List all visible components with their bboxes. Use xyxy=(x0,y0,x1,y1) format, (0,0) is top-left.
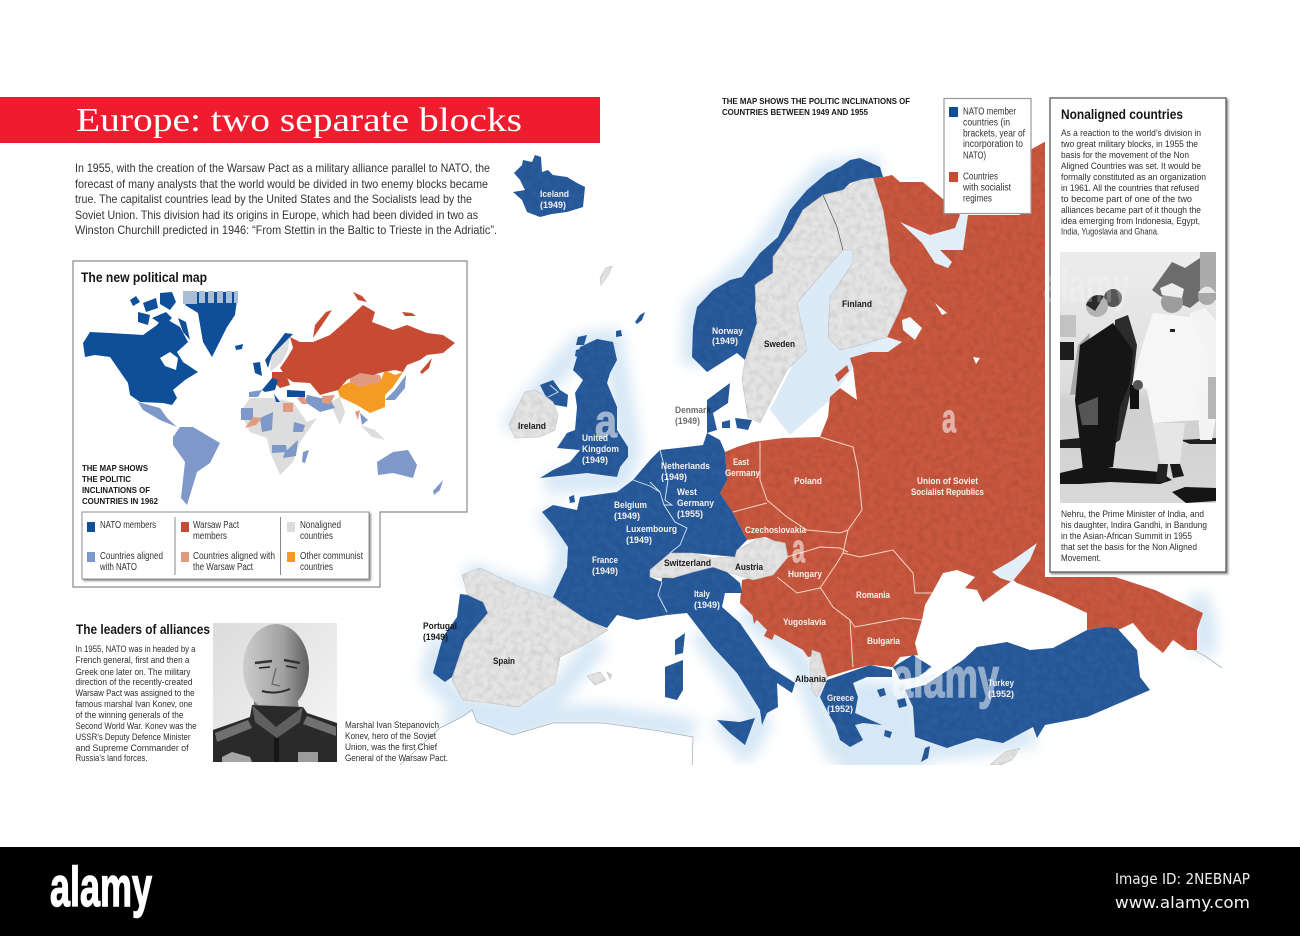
panel heading: Nonaligned countries xyxy=(1061,106,1183,122)
watermarks: alamy xyxy=(1043,260,1130,313)
caption: Konev: General of the Warsaw Pact. xyxy=(345,753,448,764)
country labels: Germany xyxy=(725,468,761,479)
socialist countries' borders xyxy=(733,437,932,667)
country labels: Italy xyxy=(694,589,711,600)
legend: main map xyxy=(944,98,1031,214)
country labels: Germany xyxy=(677,498,715,509)
intro text: Soviet Union. This division had its origins in Europe, which had been divided in two as xyxy=(75,208,478,222)
aligned with NATO xyxy=(138,375,443,505)
legend: 1962 map: Countries aligned with xyxy=(193,551,275,562)
text: leaders of alliances: Greek one later on. The military xyxy=(76,667,191,678)
panel text: Aligned Countries was set. It would be xyxy=(1061,161,1201,172)
world map xyxy=(83,291,455,505)
photo caption: his daughter, Indira Gandhi, in Bandung xyxy=(1061,520,1207,531)
Baltic and Gulf of Bothnia xyxy=(770,245,905,435)
legend: main map: NATO member xyxy=(963,106,1017,118)
panel text: in 1961. All the countries that refused xyxy=(1061,183,1199,194)
legend: main map: Countries xyxy=(963,172,998,182)
United Kingdom xyxy=(540,339,628,478)
panel text: As a reaction to the world’s division in xyxy=(1061,128,1201,139)
panel text: to become part of one of the two xyxy=(1061,194,1192,205)
inland seas and lakes xyxy=(860,215,1037,582)
country labels: Austria xyxy=(735,562,764,573)
legend: main map: with socialist xyxy=(962,182,1011,194)
panel text: two great military blocks, in 1955 the xyxy=(1061,139,1198,150)
caption: Konev: Union, was the first Chief xyxy=(345,742,437,753)
title banner: Europe: two separate blocks xyxy=(76,102,522,139)
map note: INCLINATIONS OF xyxy=(82,485,150,495)
panel heading: The new political map xyxy=(81,269,207,285)
country labels: (1949) xyxy=(712,336,738,347)
legend: 1962 map: NATO members xyxy=(100,520,156,531)
photo caption: Movement. xyxy=(1061,553,1101,564)
legend: 1962 map: Warsaw Pact xyxy=(193,520,239,531)
country labels: Romania xyxy=(856,590,891,601)
intro text xyxy=(75,161,497,237)
watermarks: a xyxy=(942,397,956,441)
country labels: Denmark xyxy=(675,405,712,416)
intro text: Winston Churchill predicted in 1946: “From Stettin in the Baltic to Trieste in the Adriatic”. xyxy=(75,223,497,237)
intro text: true. The capitalist countries lead by the United States and the Socialists lead by the xyxy=(75,192,472,206)
Hudson Bay xyxy=(160,352,178,370)
Caspian coast xyxy=(1193,650,1222,668)
country labels: (1949) xyxy=(675,416,700,427)
Western borders on the NATO block xyxy=(548,385,687,612)
Spain xyxy=(452,568,608,707)
country labels xyxy=(423,189,1015,715)
logo: alamy xyxy=(50,855,152,918)
map heading note xyxy=(722,96,910,117)
country labels: (1949) xyxy=(694,600,720,611)
Portugal xyxy=(433,594,488,682)
country labels: Bulgaria xyxy=(867,636,901,647)
legend: 1962 map: with NATO xyxy=(99,562,137,573)
legend: main map: incorporation to xyxy=(963,139,1023,150)
Albania xyxy=(810,650,827,697)
legend: 1962 map: Other communist xyxy=(300,551,363,562)
country labels: Turkey xyxy=(988,678,1015,689)
panel: the new political map xyxy=(73,261,467,587)
watermarks: a xyxy=(595,395,617,447)
site url: www.alamy.com xyxy=(1115,893,1250,912)
text: leaders of alliances: In 1955, NATO was in headed by a xyxy=(76,644,196,655)
legend: 1962 map: Nonaligned xyxy=(300,520,341,531)
text: leaders of alliances: French general, first and then a xyxy=(76,655,190,666)
image id: Image ID: 2NEBNAP xyxy=(1115,870,1250,888)
country labels: (1949) xyxy=(626,535,652,546)
Africa, Asia nonaligned base xyxy=(240,335,385,475)
country labels: Kingdom xyxy=(582,444,619,455)
Cyprus xyxy=(990,748,1020,765)
legend: 1962 map: Countries aligned xyxy=(100,551,163,562)
Warsaw Pact / socialist countries xyxy=(720,140,1203,677)
legend: main map: NATO) xyxy=(963,150,986,162)
Warsaw Pact members: USSR xyxy=(272,292,455,395)
country labels: (1949) xyxy=(661,472,687,483)
country labels: (1949) xyxy=(423,632,448,643)
map: Europe political blocks 1949-1955 xyxy=(400,140,1222,770)
footer bar xyxy=(0,847,1300,936)
map heading note: THE MAP SHOWS THE POLITIC INCLINATIONS OF xyxy=(722,96,910,106)
country labels: Czechoslovakia xyxy=(745,525,807,536)
Greece xyxy=(820,665,892,747)
aligned with Warsaw Pact xyxy=(245,372,382,428)
map note: COUNTRIES IN 1962 xyxy=(82,496,158,506)
caption: Konev xyxy=(345,720,448,764)
country labels: Portugal xyxy=(423,621,457,632)
country labels: Iceland xyxy=(540,189,569,200)
North African coast xyxy=(400,710,693,770)
watermarks xyxy=(595,260,1130,709)
country labels: Socialist Republics xyxy=(911,487,984,498)
panel: nonaligned countries xyxy=(1045,94,1231,577)
panel text: idea emerging from Indonesia, Egypt, xyxy=(1061,216,1200,227)
country labels: Netherlands xyxy=(661,461,710,472)
country labels: (1949) xyxy=(582,455,608,466)
panel text: basis for the movement of the Non xyxy=(1061,150,1189,161)
legend: 1962 map: members xyxy=(193,531,227,542)
Sweden xyxy=(742,195,843,423)
text: leaders of alliances: Warsaw Pact was assigned to the xyxy=(76,688,194,699)
legend: 1962 map: countries xyxy=(300,562,333,573)
photo caption: that set the basis for the Non Aligned xyxy=(1061,542,1197,553)
text: leaders of alliances: USSR’s Deputy Defence Minister xyxy=(76,732,191,743)
panel text: alliances became part of it though the xyxy=(1061,205,1201,216)
photo: Nehru and Indira Gandhi xyxy=(1060,252,1216,503)
Ireland xyxy=(509,390,558,438)
title banner xyxy=(0,97,600,143)
Iceland xyxy=(513,155,585,217)
text: leaders of alliances: of the winning generals of the xyxy=(76,710,184,721)
France, Benelux and West Germany xyxy=(542,433,747,628)
watermark stripes over Greenland xyxy=(183,291,238,304)
country labels: Poland xyxy=(794,476,822,487)
country labels: (1952) xyxy=(988,689,1014,700)
NATO members xyxy=(433,155,1150,762)
country labels: France xyxy=(592,555,618,566)
country labels: Switzerland xyxy=(664,558,711,569)
photo caption xyxy=(1061,509,1207,564)
map note xyxy=(82,463,158,506)
Denmark xyxy=(707,383,730,433)
NATO members xyxy=(83,292,305,405)
legend: 1962 map: countries xyxy=(300,531,333,542)
country labels: Sweden xyxy=(764,339,795,350)
text: leaders of alliances: and Supreme Commander of xyxy=(76,743,189,754)
watermarks: alamy xyxy=(892,646,999,709)
country labels: Albania xyxy=(795,674,827,685)
country labels: (1952) xyxy=(827,704,853,715)
legend: 1962 map: the Warsaw Pact xyxy=(193,562,253,573)
map note: THE POLITIC xyxy=(82,474,131,484)
country labels: Spain xyxy=(493,656,515,667)
country labels: Finland xyxy=(842,299,872,310)
intro text: forecast of many analysts that the world would be divided in two enemy blocks became xyxy=(75,177,488,191)
country labels: Hungary xyxy=(788,569,823,580)
caption: Konev: Konev, hero of the Soviet xyxy=(345,731,436,742)
intro text: In 1955, with the creation of the Warsaw Pact as a military alliance parallel to NATO, the xyxy=(75,161,490,175)
Sea of Marmara xyxy=(911,674,936,684)
heading: leaders of alliances: The leaders of alliances xyxy=(76,621,210,637)
legend: 1962 map xyxy=(82,512,369,579)
legend: main map: regimes xyxy=(963,194,992,204)
country labels: Yugoslavia xyxy=(783,617,827,628)
Turkey xyxy=(905,627,1150,748)
Black Sea xyxy=(918,573,1090,662)
Sweden / Finland border xyxy=(823,195,843,250)
country labels: (1949) xyxy=(614,511,640,522)
photo caption: Nehru, the Prime Minister of India, and xyxy=(1061,509,1204,520)
country labels: (1955) xyxy=(677,509,703,520)
country labels: East xyxy=(733,457,750,468)
panel text: India, Yugoslavia and Ghana. xyxy=(1061,226,1159,238)
text: leaders of alliances: Second World War. Konev was the xyxy=(76,721,196,732)
sea glow around the coasts xyxy=(432,165,1205,765)
country labels: West xyxy=(677,487,698,498)
country labels: Belgium xyxy=(614,500,647,511)
text: leaders of alliances: famous marshal Ivan Konev, one xyxy=(76,699,192,710)
photo: Marshal Konev xyxy=(213,623,337,762)
text: leaders of alliances: direction of the recently-created xyxy=(76,677,192,688)
Nonaligned countries xyxy=(452,178,1020,765)
country labels: Union of Soviet xyxy=(917,476,979,487)
watermarks: a xyxy=(792,527,805,571)
country labels: United xyxy=(582,433,608,444)
Italy xyxy=(660,565,795,725)
country labels: Luxembourg xyxy=(626,524,677,535)
Faroe Islands xyxy=(600,266,612,285)
map heading note: COUNTRIES BETWEEN 1949 AND 1955 xyxy=(722,107,868,117)
Switzerland and Austria xyxy=(650,538,788,580)
panel text: formally constituted as an organization xyxy=(1061,172,1206,183)
photo caption: in the Asian-African Summit in 1955 xyxy=(1061,531,1192,542)
Finland xyxy=(823,178,907,350)
map note: THE MAP SHOWS xyxy=(82,463,148,473)
country labels: (1949) xyxy=(592,566,618,577)
country labels: Norway xyxy=(712,326,744,337)
text: leaders of alliances: Russia’s land forces. xyxy=(76,753,148,764)
Norway xyxy=(692,158,883,372)
country labels: Greece xyxy=(827,693,854,704)
other communist countries: China xyxy=(337,370,403,413)
country labels: (1949) xyxy=(540,200,566,211)
legend: main map: countries (in xyxy=(963,118,1010,128)
country labels: Ireland xyxy=(518,421,546,432)
text: leaders of alliances xyxy=(76,644,196,764)
legend: main map: brackets, year of xyxy=(963,128,1025,140)
caption: Konev: Marshal Ivan Stepanovich xyxy=(345,720,439,731)
panel text xyxy=(1061,128,1206,238)
